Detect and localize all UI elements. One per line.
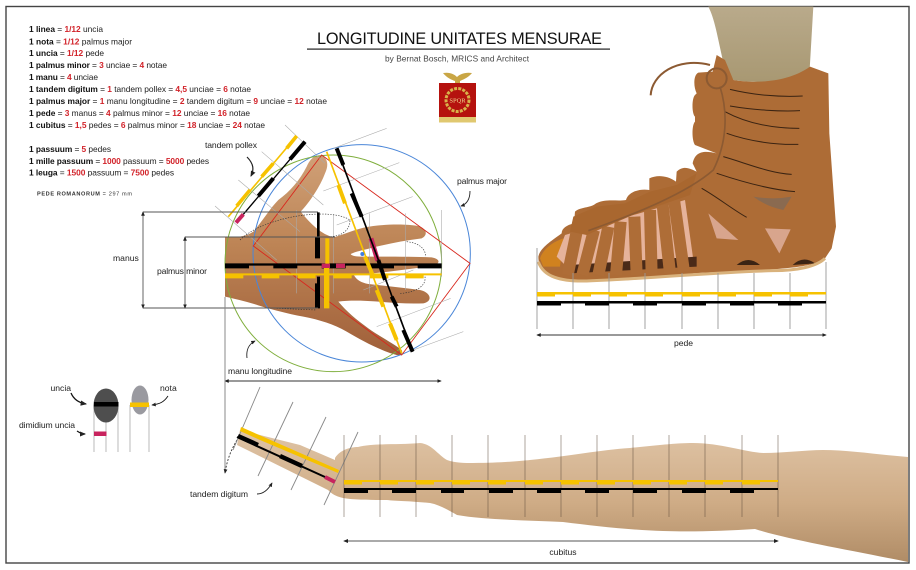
- toe straps: [568, 200, 684, 275]
- label: manu longitudine: manu longitudine: [228, 366, 292, 376]
- label: pede: pede: [674, 338, 693, 348]
- arrow: nota: [152, 396, 168, 405]
- arrow: tandem pollex: [247, 157, 253, 176]
- title: LONGITUDINE UNITATES MENSURAE: [317, 30, 602, 48]
- vertical guide line: [224, 297, 226, 473]
- sole: [538, 258, 825, 281]
- bar: thumb black: [243, 142, 305, 214]
- text: palmus minor: 1 palmus minor = 3 unciae = 4 notae: [29, 60, 167, 70]
- arrow: pede span: [537, 334, 826, 336]
- label: cubitus: cubitus: [549, 547, 577, 557]
- tick lines: [94, 405, 149, 452]
- arrow: tandem digitum: [257, 483, 272, 494]
- list: unit definitions: [29, 24, 327, 178]
- icon: large fingerprint: [94, 388, 118, 422]
- bar: vertical black: [315, 212, 320, 308]
- leg: [708, 7, 813, 82]
- label: palmus minor: palmus minor: [157, 266, 207, 276]
- circle: manu longitudine: [225, 155, 442, 372]
- text: cubitus: 1 cubitus = 1,5 pedes = 6 palmus minor = 18 unciae = 24 notae: [29, 120, 265, 130]
- icon: SPQR emblem: [439, 73, 476, 122]
- label: tandem pollex: tandem pollex: [205, 140, 258, 150]
- panel: hand diagram: [215, 125, 470, 372]
- text: mille passuum: 1 mille passuum = 1000 passuum = 5000 pedes: [29, 156, 209, 166]
- side openings: [708, 213, 738, 240]
- subtitle: by Bernat Bosch, MRICS and Architect: [385, 54, 530, 64]
- bar: yellow notae: [537, 292, 826, 296]
- text: leuga: 1 leuga = 1500 passuum = 7500 pedes: [29, 168, 174, 178]
- marker dots: [360, 252, 364, 256]
- scale: tandem digitum: [190, 387, 358, 505]
- text: nota: 1 nota = 1/12 palmus major: [29, 36, 132, 46]
- text: pede: 1 pede = 3 manus = 4 palmus minor = 12 unciae = 16 notae: [29, 108, 250, 118]
- hand: [225, 155, 439, 355]
- bar: nota: [130, 402, 149, 407]
- bar: horizontal yellow: [225, 273, 442, 278]
- dimension: manus: [143, 212, 335, 308]
- panel: sandal illustration: [538, 7, 836, 281]
- text: manu: 1 manu = 4 unciae: [29, 72, 98, 82]
- bar: yellow: [240, 427, 339, 473]
- arrow: dashed arc: [225, 440, 237, 473]
- tick lines: [215, 125, 463, 350]
- text: linea: 1 linea = 1/12 uncia: [29, 24, 103, 34]
- arrow: uncia: [71, 393, 86, 404]
- bar: uncia: [94, 402, 118, 406]
- text: uncia: 1 uncia = 1/12 pede: [29, 48, 104, 58]
- arrow: palmus major: [461, 191, 470, 206]
- circle: palmus major: [253, 145, 470, 362]
- scale: cubitus ruler: [344, 435, 778, 557]
- ankle strap slits: [702, 89, 803, 217]
- panel: finger prints: [19, 383, 177, 452]
- icon: small fingerprint: [132, 386, 148, 414]
- magenta thumb end: [236, 214, 243, 223]
- bar: yellow notae: [344, 480, 778, 484]
- arrow: dimidium: [77, 431, 85, 434]
- bar: thumb yellow: [228, 136, 297, 217]
- text: palmus major: 1 palmus major = 1 manu longitudine = 2 tandem digitum = 9 unciae = 12 notae: [29, 96, 327, 106]
- magenta end: [325, 477, 335, 482]
- arrow: cubitus span: [344, 540, 778, 542]
- dashed finger outlines: [240, 214, 425, 310]
- label: nota: nota: [160, 383, 177, 393]
- scale: pede ruler: [537, 248, 826, 348]
- arrow: manu longitudine span: [225, 380, 441, 382]
- strap tops: [570, 173, 697, 235]
- bar: black unciae: [537, 301, 826, 306]
- sandal body: [538, 55, 836, 281]
- icon: SPQR emblem: SPQR: [449, 98, 466, 104]
- bar: diagonal black: [337, 148, 413, 352]
- bar: black unciae: [344, 488, 778, 493]
- title underline: [307, 48, 610, 50]
- label: dimidium uncia: dimidium uncia: [19, 420, 75, 430]
- label: palmus major: palmus major: [457, 176, 507, 186]
- bar: dimidium uncia: [94, 432, 106, 436]
- magenta marks: [322, 238, 380, 268]
- arrow: manu longitudine pointer: [247, 341, 255, 358]
- panel: forearm photo: [237, 430, 908, 562]
- text: pede romanorum: PEDE ROMANORUM = 297 mm: [37, 192, 132, 198]
- insole and toes: [540, 238, 563, 267]
- label: manus: manus: [113, 253, 139, 263]
- label: uncia: uncia: [50, 383, 71, 393]
- bar: black: [237, 437, 325, 477]
- bar: diagonal yellow: [327, 152, 402, 353]
- text: tandem digitum: 1 tandem digitum = 1 tandem pollex = 4,5 unciae = 6 notae: [29, 84, 251, 94]
- bar: vertical yellow: [324, 238, 329, 308]
- text: passuum: 1 passuum = 5 pedes: [29, 144, 111, 154]
- bar: horizontal black: [225, 263, 442, 268]
- lace: [588, 63, 727, 231]
- label: tandem digitum: tandem digitum: [190, 489, 248, 499]
- red rectangle: [253, 155, 470, 355]
